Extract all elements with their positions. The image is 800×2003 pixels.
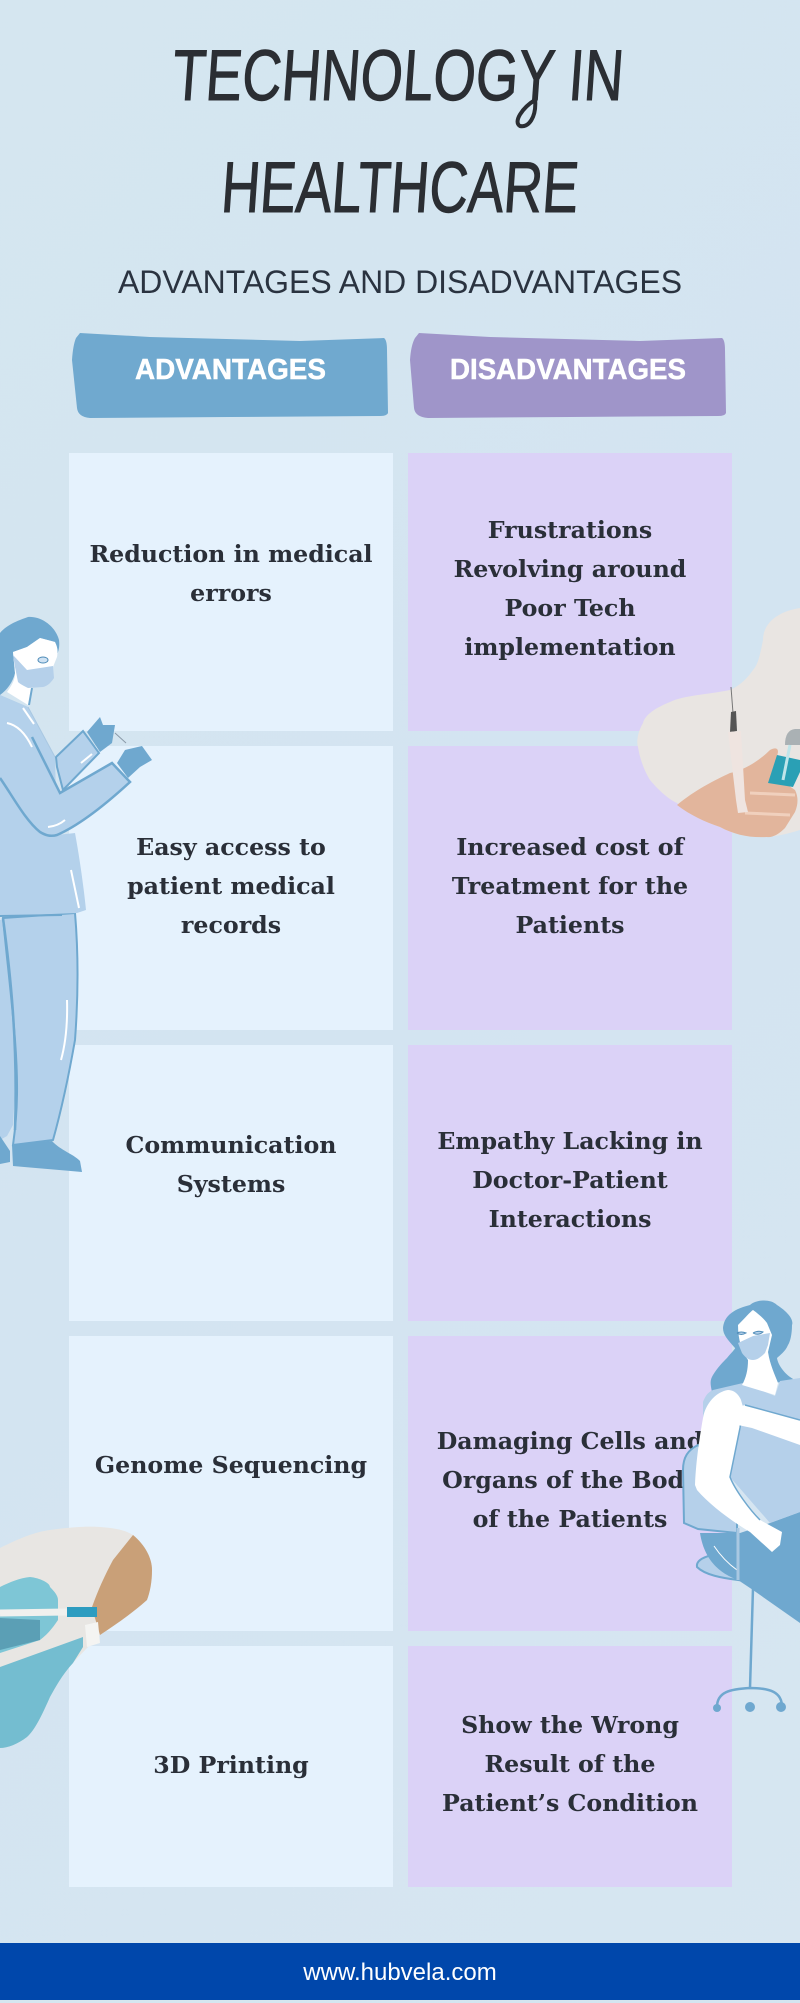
text: empathy: Doctor-Patient [472, 1166, 668, 1194]
text: communication systems: Communication [126, 1131, 336, 1159]
text: easy access [127, 833, 335, 939]
text: communication systems: Systems [177, 1170, 285, 1198]
advantages header [72, 333, 388, 418]
text: frustrations: implementation [464, 633, 676, 661]
text: wrong result: Patient’s Condition [442, 1789, 698, 1817]
text: damaging cells: Organs of the Body [442, 1466, 698, 1494]
disadvantages header: DISADVANTAGES [450, 354, 686, 386]
text: increased cost: Increased cost of [456, 833, 684, 861]
text: damaging cells [437, 1427, 703, 1533]
panel: disadvantage 4 [408, 1336, 732, 1631]
text: frustrations [454, 516, 686, 661]
header [72, 36, 726, 418]
illustration: syringe photo [637, 608, 800, 837]
text: communication systems [126, 1131, 336, 1198]
disadvantages header [410, 333, 726, 418]
text: empathy: Empathy Lacking in [437, 1127, 703, 1155]
title: HEALTHCARE [219, 148, 581, 228]
text: frustrations: Revolving around [454, 555, 686, 583]
text: easy access: patient medical [127, 872, 335, 900]
text: damaging cells: Damaging Cells and [437, 1427, 703, 1455]
panel: disadvantage 5 [408, 1646, 732, 1887]
text: easy access: records [181, 911, 281, 939]
illustration: injection photo [0, 1527, 152, 1748]
text: increased cost: Treatment for the [452, 872, 688, 900]
panel: disadvantage 1 [408, 453, 732, 731]
text: genome sequencing: Genome Sequencing [95, 1451, 367, 1479]
text: wrong result [442, 1711, 698, 1817]
panel: advantage 2 [69, 746, 393, 1030]
subtitle: ADVANTAGES AND DISADVANTAGES [118, 264, 682, 300]
text: easy access: Easy access to [136, 833, 326, 861]
footer [0, 1943, 800, 2000]
illustration: seated woman [683, 1300, 800, 1712]
text: reduction in medical errors: errors [190, 579, 272, 607]
text: damaging cells: of the Patients [473, 1505, 667, 1533]
advantages header: ADVANTAGES [135, 354, 326, 386]
title: TECHNOLOGY IN [170, 36, 626, 116]
text: increased cost: Patients [515, 911, 625, 939]
panel: disadvantage 3 [408, 1045, 732, 1321]
text: wrong result: Result of the [484, 1750, 655, 1778]
panel: advantage 4 [69, 1336, 393, 1631]
text: 3d printing: 3D Printing [153, 1751, 309, 1779]
title [170, 36, 626, 228]
text: increased cost [452, 833, 688, 939]
text: reduction in medical errors [89, 540, 373, 607]
text: wrong result: Show the Wrong [461, 1711, 679, 1739]
text: frustrations: Frustrations [488, 516, 652, 544]
illustration: doctor [0, 617, 152, 1172]
panel: disadvantage 2 [408, 746, 732, 1030]
text: frustrations: Poor Tech [504, 594, 636, 622]
text: empathy [437, 1127, 703, 1233]
panel: advantage 5 [69, 1646, 393, 1887]
footer: www.hubvela.com [303, 1959, 497, 1986]
panel: advantage 3 [69, 1045, 393, 1321]
text: empathy: Interactions [489, 1205, 651, 1233]
panel: advantage 1 [69, 453, 393, 731]
text: reduction in medical errors: Reduction in medical [89, 540, 373, 568]
